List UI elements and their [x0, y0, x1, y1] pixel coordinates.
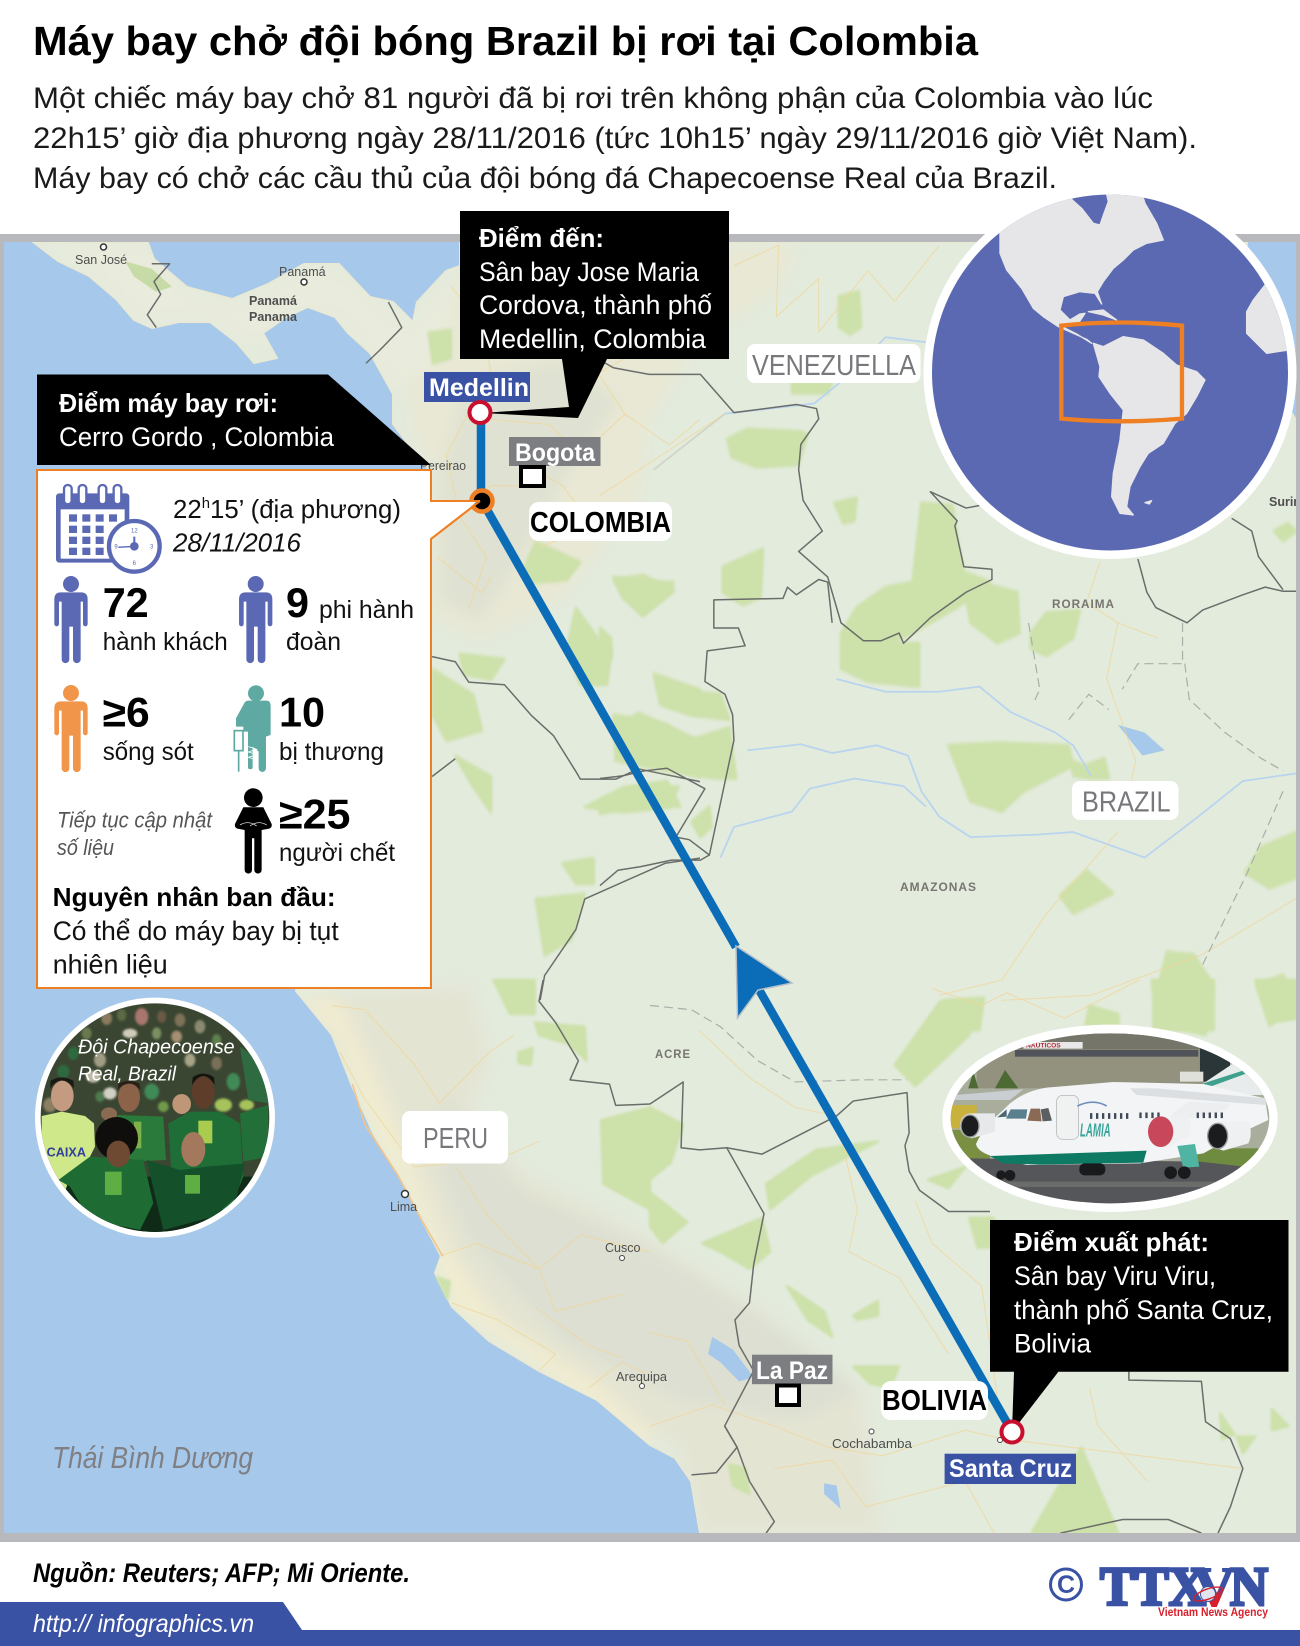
callout: departure: [990, 1220, 1288, 1432]
Lima: [391, 1190, 418, 1211]
tarmac: [970, 1158, 1273, 1207]
footer band: [0, 1602, 1300, 1646]
Lima: Lima: [390, 1200, 417, 1214]
intro text: Một chiếc máy bay chở 81 người đã bị rơi trên không phận của Colombia vào lúc: [33, 82, 1153, 115]
airline logo: LAMIA: [1080, 1120, 1111, 1141]
callout: destination: Cordova, thành phố: [479, 290, 712, 320]
rivers: [654, 337, 1296, 858]
stat: crew: đoàn: [286, 628, 341, 656]
panel: crash details: [37, 470, 480, 988]
kneeling players: [58, 1157, 153, 1230]
logo: TTXVN: [1100, 1556, 1269, 1619]
country label: Venezuela: VENEZUELLA: [752, 350, 917, 382]
update note: Tiếp tục cập nhật: [57, 808, 213, 832]
update note: [57, 808, 213, 860]
capital: Bogota: Bogota: [515, 439, 596, 467]
icon: injured person with crutch: [234, 685, 271, 772]
photo: aircraft: NÁUTICOS: [1026, 1040, 1061, 1049]
city labels: Panama: [249, 310, 298, 324]
caption: Đội Chapecoense: [78, 1035, 235, 1058]
city labels: ACRE: [655, 1047, 691, 1061]
city labels: AMAZONAS: [900, 880, 977, 894]
borders north-west: [147, 264, 402, 363]
initial cause: Có thể do máy bay bị tụt: [53, 916, 339, 946]
callout: crash site: [37, 374, 431, 465]
calendar and clock icon: [56, 485, 160, 572]
Arequipa: Arequipa: [616, 1370, 667, 1384]
country label: Bolivia: BOLIVIA: [882, 1385, 987, 1417]
route leg Medellin to crash site: [477, 420, 485, 496]
green areas west: [429, 330, 700, 955]
stat: deaths: ≥25: [279, 790, 350, 838]
intro text: [33, 82, 1197, 195]
country label: Colombia: COLOMBIA: [530, 507, 671, 539]
time text: [172, 494, 401, 558]
stat: injured: [234, 685, 384, 772]
lakes: [708, 1337, 754, 1381]
right engine: [1217, 1122, 1251, 1151]
map frame: [0, 234, 1300, 1542]
photo: team: [30, 990, 280, 1240]
Cusco: [606, 1243, 640, 1261]
land: [33, 242, 1296, 1533]
roads south-west: [332, 1005, 650, 1388]
roads west: [437, 287, 700, 608]
tail: [1203, 1063, 1265, 1095]
capital: Bogota: [509, 437, 600, 486]
continents: [990, 187, 1300, 515]
Panamá: Panamá: [279, 265, 326, 279]
website: http:// infographics.vn: [33, 1610, 254, 1638]
logo: TTXVN: TTX: [1100, 1556, 1206, 1617]
back players: [98, 1115, 166, 1162]
forest and borders south-west: [332, 980, 650, 1388]
Panamá: [279, 265, 326, 285]
Costa Rica forest: [125, 261, 172, 292]
source: Nguồn: Reuters; AFP; Mi Oriente.: [33, 1558, 410, 1588]
Cochabamba: Cochabamba: [832, 1437, 912, 1451]
goalkeeper: [42, 1112, 95, 1197]
lower dark fill: [30, 1177, 280, 1240]
Santa Cruz dot: [998, 1438, 1002, 1442]
stat: crew: 9: [286, 579, 309, 626]
landing gear: [996, 1163, 1191, 1181]
calendar and clock icon: 6: [133, 561, 137, 567]
terminal building: [977, 1033, 1203, 1088]
orange coast highway: [352, 1084, 443, 1256]
intro text: 22h15’ giờ địa phương ngày 28/11/2016 (tức 10h15’ ngày 29/11/2016 giờ Việt Nam).: [33, 122, 1197, 155]
cabin windows: [1090, 1107, 1223, 1124]
forest and borders south-east: [650, 980, 1300, 1533]
time text: 28/11/2016: [172, 528, 302, 558]
stat: passengers: [54, 576, 228, 663]
globe emblem: [1192, 1584, 1224, 1604]
stat: deaths: người chết: [279, 839, 395, 867]
ocean: [4, 242, 1296, 1533]
grass: [950, 1130, 990, 1160]
stat: survivors: ≥6: [103, 688, 150, 736]
stat: injured: 10: [279, 688, 325, 736]
borders north-east: [600, 360, 1296, 886]
stat: deaths: [235, 788, 395, 874]
borders south-east: [650, 1082, 1243, 1533]
callout: destination: Medellin, Colombia: [479, 324, 707, 354]
green areas north-east: [600, 291, 1296, 1030]
marker: Medellin: [470, 402, 490, 423]
Cochabamba: [832, 1428, 912, 1448]
logo: TTXVN: N: [1230, 1556, 1268, 1617]
callout: crash site: Điểm máy bay rơi:: [59, 388, 278, 418]
title: Máy bay chở đội bóng Brazil bị rơi tại Colombia: [33, 18, 979, 64]
stat: passengers: hành khách: [103, 628, 228, 656]
panel box: [37, 470, 480, 988]
forest and borders north-east: [600, 245, 1296, 1030]
callout: departure: Sân bay Viru Viru,: [1014, 1261, 1216, 1291]
update note: số liệu: [57, 835, 114, 860]
state line: [650, 1005, 907, 1082]
photo: aircraft: [940, 1020, 1285, 1220]
calendar and clock icon: 12: [131, 528, 138, 534]
lake: [1118, 725, 1165, 756]
copyright mark: [1050, 1569, 1082, 1600]
country label: Peru: [402, 1111, 508, 1164]
inset: globe: [924, 186, 1300, 559]
initial cause: Nguyên nhân ban đầu:: [53, 882, 336, 912]
icon: person black: [235, 788, 272, 874]
photo: team: Real, Brazil: [78, 1063, 177, 1086]
stat: crew: [239, 576, 414, 663]
Pacific Ocean label: Thái Bình Dương: [52, 1440, 253, 1475]
coastal strip: Panama and Costa Rica details: [125, 261, 402, 363]
callout: departure: Bolivia: [1014, 1328, 1092, 1358]
roads south-east: [650, 980, 1243, 1533]
stat: survivors: [54, 685, 194, 772]
icon: person blue: [54, 576, 88, 663]
left engine: [960, 1113, 995, 1138]
state lines: [1029, 623, 1283, 965]
capital: La Paz: La Paz: [756, 1357, 828, 1385]
crowd: [43, 1008, 254, 1112]
icon: person orange: [54, 685, 88, 772]
near engine with red cover: [1160, 1117, 1191, 1147]
callout: crash site: Cerro Gordo , Colombia: [59, 422, 335, 452]
flap: [1177, 1144, 1199, 1168]
initial cause: nhiên liệu: [53, 950, 168, 980]
stat: crew: phi hành: [319, 596, 414, 624]
initial cause: [53, 882, 339, 980]
far wing: [955, 1089, 1023, 1100]
highlands tint: [312, 258, 870, 1526]
logo: TTXVN: Vietnam News Agency: [1158, 1607, 1269, 1619]
callout: departure: Điểm xuất phát:: [1014, 1227, 1209, 1257]
stat: passengers: 72: [103, 579, 149, 626]
label: Medellin: Medellin: [429, 374, 529, 402]
logo: TTXVN: V: [1193, 1556, 1235, 1617]
flight route: [481, 420, 1010, 1428]
flag: [240, 1047, 268, 1103]
time text: 15’ (địa phương): [210, 494, 401, 524]
capital: La Paz: [752, 1355, 832, 1405]
label: Santa Cruz: Santa Cruz: [949, 1455, 1072, 1483]
fuselage: [976, 1082, 1268, 1165]
signboard: [1023, 1042, 1083, 1049]
cockpit windows: [997, 1109, 1007, 1117]
country label: Peru: PERU: [423, 1123, 488, 1155]
Cusco: Cusco: [605, 1241, 640, 1255]
calendar and clock icon: 9: [114, 545, 118, 551]
Panamá Panama region: Panamá: [249, 294, 297, 308]
callout: destination: Sân bay Jose Maria: [479, 257, 700, 287]
time text: h: [202, 495, 210, 512]
callout: departure: thành phố Santa Cruz,: [1014, 1295, 1273, 1325]
door: [1057, 1095, 1079, 1139]
callout: destination: Điểm đến:: [479, 223, 604, 253]
arrowhead: [736, 946, 792, 1018]
icon: person blue crew: [239, 576, 272, 663]
country label: Brazil: BRAZIL: [1082, 786, 1170, 818]
intro text: Máy bay có chở các cầu thủ của đội bóng đá Chapecoense Real của Brazil.: [33, 162, 1057, 195]
map: [4, 242, 1300, 1533]
callout: destination: [460, 211, 729, 418]
near wing: [1130, 1088, 1267, 1105]
San José: San José: [75, 253, 127, 267]
city labels: RORAIMA: [1052, 597, 1115, 611]
sponsor badge: CAIXA: [47, 1145, 86, 1160]
stat: survivors: sống sót: [103, 738, 194, 766]
stat: injured: bị thương: [279, 738, 384, 766]
calendar and clock icon: 3: [150, 545, 154, 551]
San José: [76, 243, 126, 264]
green areas south-east: [650, 980, 1300, 1533]
copyright mark: C: [1057, 1571, 1075, 1599]
border Peru Brazil: [539, 980, 650, 1105]
forest and borders west: [429, 287, 700, 1000]
time text: 22: [173, 494, 202, 524]
city labels: Pereirao: [420, 459, 466, 473]
marker: crash site: [431, 490, 492, 539]
region frame: [1061, 322, 1182, 421]
route leg main: [486, 508, 736, 947]
city labels: [75, 244, 1300, 1451]
borders west: [432, 657, 700, 1000]
green areas south-west: [437, 980, 650, 1299]
marker: Santa Cruz: [1002, 1422, 1022, 1442]
roads north-east: [600, 245, 1296, 1000]
